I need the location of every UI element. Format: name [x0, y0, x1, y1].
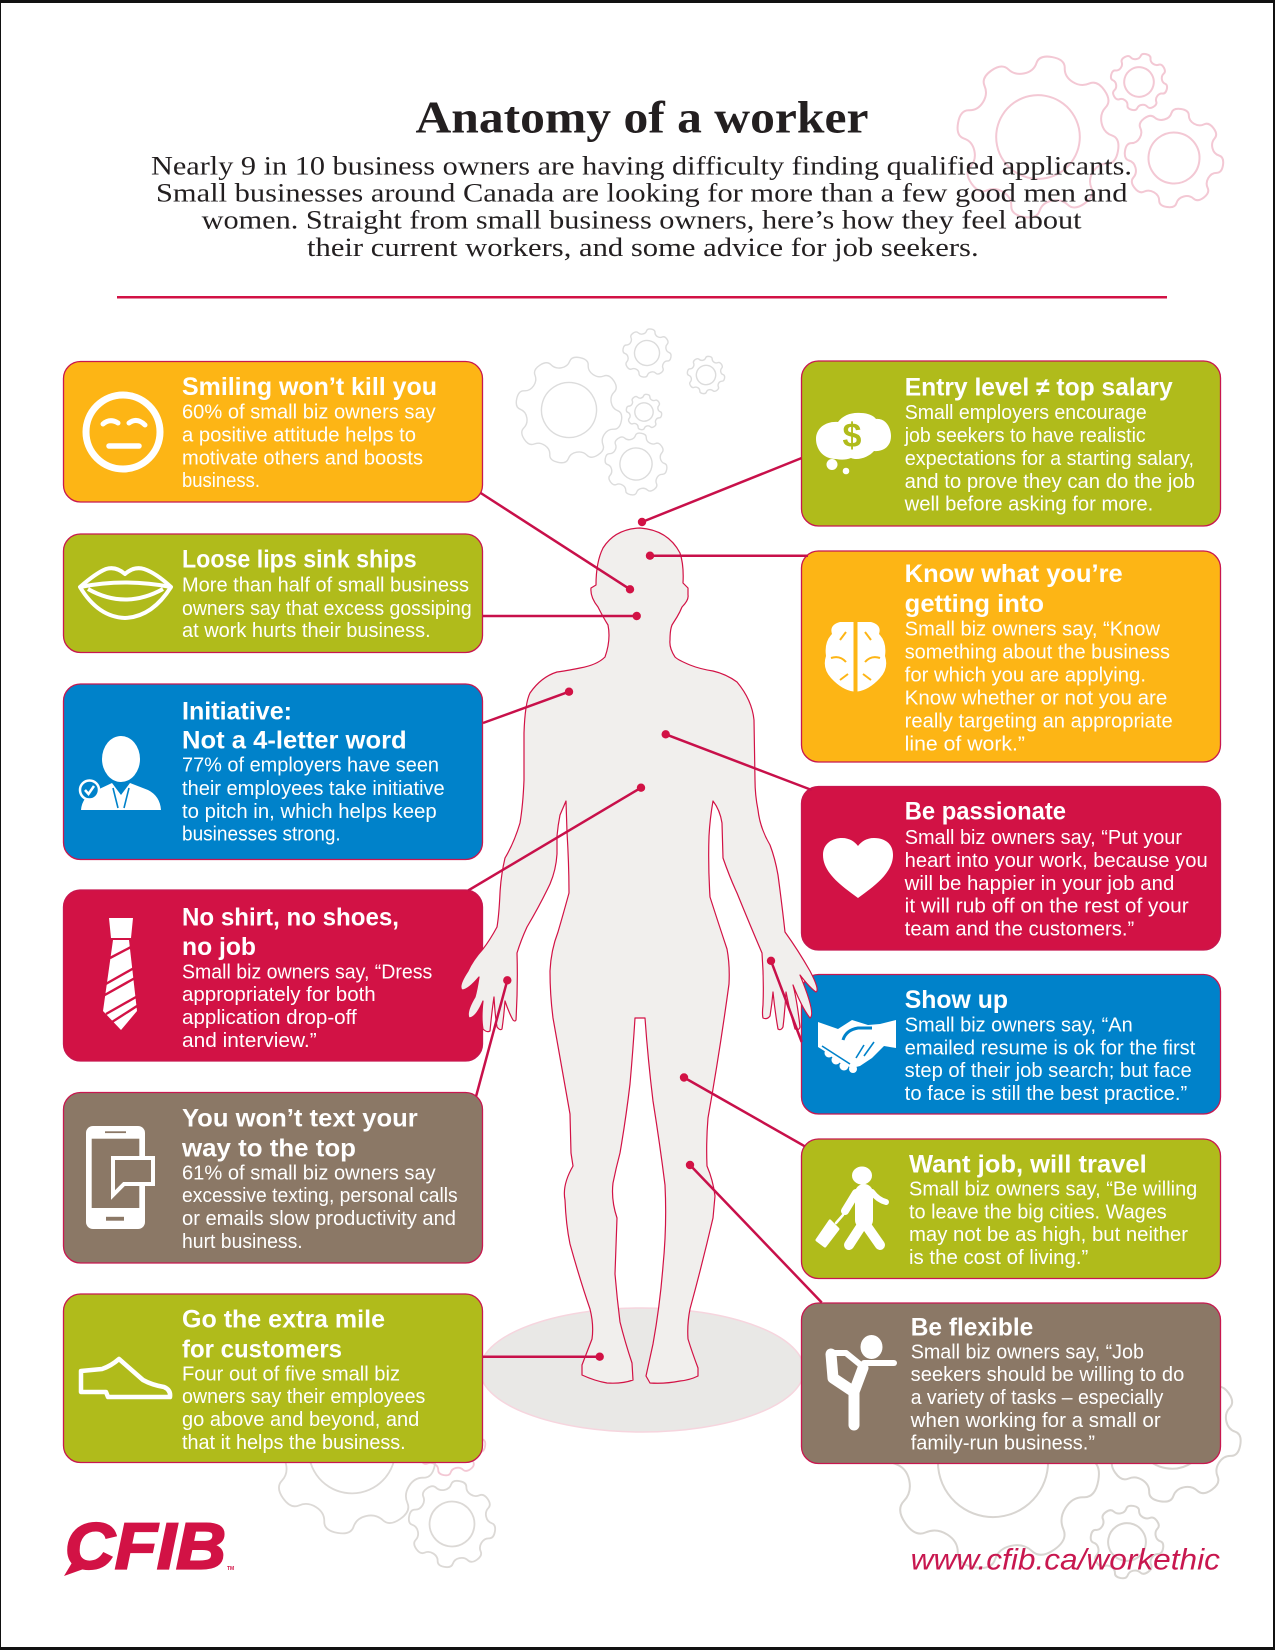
intro text: their current workers, and some advice for job seekers.	[307, 233, 979, 262]
panel: Initiative: Initiative:	[182, 697, 292, 725]
leader line: salary	[638, 458, 802, 526]
panel: Be flexible: Be flexible	[911, 1313, 1033, 1341]
panel: Want job, will travel	[802, 1139, 1220, 1278]
panel: No shirt, no shoes, no job: and interview.”	[182, 1030, 317, 1052]
panel: Show up: Small biz owners say, “An	[905, 1015, 1133, 1037]
panel: Want job, will travel: Small biz owners say, “Be willing	[909, 1178, 1197, 1200]
panel: Be flexible: family-run business.”	[911, 1432, 1095, 1454]
leader line: phone	[476, 976, 511, 1097]
panel: Smiling won't kill you: motivate others and boosts	[182, 448, 423, 470]
panel: Show up	[802, 974, 1220, 1114]
icon: heart	[823, 838, 893, 898]
human figure	[461, 528, 817, 1383]
panel: Loose lips sink ships: More than half of small business	[182, 575, 469, 597]
icon: person with check	[80, 736, 161, 810]
panel: Loose lips sink ships	[64, 534, 482, 652]
panel: Know what you're getting into: getting into	[905, 590, 1044, 618]
panel: Be passionate: Be passionate	[905, 797, 1066, 825]
intro text: Small businesses around Canada are looking for more than a few good men and	[156, 178, 1128, 208]
panel: Entry level does not equal top salary	[802, 361, 1220, 526]
panel: Initiative	[64, 684, 482, 860]
floor ellipse	[480, 1308, 804, 1432]
panel: No shirt, no shoes, no job	[64, 890, 482, 1061]
panel: Know what you're getting into: Know what you’re	[905, 560, 1123, 588]
panel: Entry level does not equal top salary: job seekers to have realistic	[904, 425, 1146, 447]
panel: Entry level does not equal top salary: and to prove they can do the job	[905, 471, 1195, 493]
intro text: Nearly 9 in 10 business owners are having difficulty finding qualified applicants.	[151, 151, 1132, 180]
panel: Initiative: their employees take initiative	[182, 778, 445, 800]
decorative gears: bottom right	[869, 1338, 1252, 1586]
panel: Want job, will travel: Want job, will travel	[909, 1150, 1147, 1178]
panel: Be flexible: a variety of tasks – especially	[911, 1387, 1163, 1409]
panel: Go the extra mile for customers: that it helps the business.	[182, 1432, 406, 1454]
icon: shoe	[81, 1359, 170, 1397]
panel: No shirt, no shoes, no job: application drop-off	[182, 1007, 357, 1029]
CFIB logo: TM	[227, 1566, 234, 1572]
panel: Be flexible: seekers should be willing to do	[911, 1364, 1184, 1386]
panel: Want job, will travel: is the cost of living.”	[909, 1247, 1088, 1269]
leader line: heart	[662, 730, 812, 790]
panel: Smiling won't kill you: business.	[182, 470, 260, 492]
header rule	[117, 296, 1167, 298]
panel: Smiling won't kill you: a positive attitude helps to	[182, 425, 416, 447]
panel: Smiling won't kill you: Smiling won’t kill you	[182, 373, 437, 401]
leader line: brain	[646, 552, 808, 560]
icon: lips	[80, 568, 171, 618]
icon: phone with speech bubble	[86, 1126, 153, 1229]
panel: No shirt, no shoes, no job: Small biz owners say, “Dress	[182, 962, 432, 984]
panel: Go the extra mile for customers: Four out of five small biz	[182, 1363, 400, 1385]
panel: Know what you're getting into: really targeting an appropriate	[905, 710, 1173, 732]
panel: Be passionate	[802, 786, 1220, 950]
panel: Know what you're getting into: for which you are applying.	[905, 664, 1146, 686]
panel: Be passionate: heart into your work, because you	[905, 850, 1208, 872]
panel: Know what you're getting into: Know whether or not you are	[905, 687, 1167, 709]
leader line: flexible	[686, 1161, 822, 1302]
panel: Want job, will travel: to leave the big cities. Wages	[909, 1201, 1167, 1223]
panel: No shirt, no shoes, no job: appropriately for both	[182, 984, 376, 1006]
panel: Show up: to face is still the best practice.”	[905, 1083, 1187, 1105]
panel: Initiative: to pitch in, which helps keep	[182, 801, 437, 823]
panel: Show up: step of their job search; but face	[905, 1060, 1192, 1082]
panel: Go the extra mile for customers: go above and beyond, and	[182, 1409, 419, 1431]
icon: handshake	[818, 1020, 896, 1073]
decorative gears: top right	[944, 43, 1230, 231]
panel: Go the extra mile for customers: owners say their employees	[182, 1386, 425, 1408]
intro text: women. Straight from small business owners, here’s how they feel about	[202, 206, 1083, 235]
leader line: shoe	[483, 1352, 604, 1361]
panel: Know what you're getting into	[802, 551, 1220, 762]
panel: Smiling won't kill you	[64, 362, 482, 502]
panel: You won't text your way to the top: 61% of small biz owners say	[182, 1162, 436, 1184]
panel: Know what you're getting into: something about the business	[905, 642, 1170, 664]
panel: Be flexible: Small biz owners say, “Job	[911, 1342, 1144, 1364]
panel: You won't text your way to the top: way to the top	[181, 1135, 356, 1163]
leader line: initiative	[483, 688, 573, 723]
panel: Be passionate: will be happier in your job and	[904, 873, 1174, 895]
panel: Show up: emailed resume is ok for the first	[905, 1038, 1196, 1060]
CFIB logo: CFIB	[65, 1510, 226, 1582]
website URL: www.cfib.ca/workethic	[911, 1544, 1220, 1577]
leader line: handshake	[767, 957, 802, 1042]
decorative gears: bottom left	[255, 1353, 502, 1574]
panel: Loose lips sink ships: at work hurts their business.	[182, 620, 431, 642]
leader line: tie	[468, 784, 645, 891]
icon: thought cloud with dollar: $	[843, 417, 862, 455]
panel: Loose lips sink ships: owners say that excess gossiping	[182, 598, 472, 620]
leader line: travel	[680, 1073, 805, 1146]
panel: You won't text your way to the top: or emails slow productivity and	[182, 1208, 456, 1230]
panel: You won't text your way to the top: excessive texting, personal calls	[182, 1185, 458, 1207]
panel: Want job, will travel: may not be as high, but neither	[909, 1224, 1188, 1246]
icon: stretching figure	[829, 1335, 894, 1425]
leader line: smile	[481, 493, 634, 594]
icon: thought cloud with dollar	[816, 413, 891, 474]
panel: Be passionate: Small biz owners say, “Put your	[905, 827, 1182, 849]
panel: Be flexible	[802, 1303, 1220, 1464]
panel: You won't text your way to the top	[64, 1092, 482, 1263]
panel: No shirt, no shoes, no job: no job	[182, 933, 256, 961]
panel: You won't text your way to the top: You won’t text your	[182, 1105, 418, 1133]
panel: Go the extra mile for customers: Go the extra mile	[182, 1306, 385, 1334]
panel: Entry level does not equal top salary: Small employers encourage	[905, 402, 1147, 424]
panel: Entry level does not equal top salary: expectations for a starting salary,	[905, 448, 1194, 470]
icon: traveller with suitcase	[817, 1166, 886, 1246]
panel: No shirt, no shoes, no job: No shirt, no shoes,	[182, 904, 399, 932]
panel: Go the extra mile for customers: for customers	[182, 1336, 342, 1364]
panel: Show up: Show up	[905, 986, 1008, 1014]
decorative gears: above the figure	[506, 325, 728, 500]
icon: brain	[825, 622, 886, 692]
leader line: lips	[483, 612, 641, 620]
panel: Go the extra mile for customers	[64, 1294, 482, 1462]
intro text	[151, 151, 1132, 262]
icon: necktie	[103, 918, 137, 1030]
title: Anatomy of a worker	[416, 93, 868, 143]
panel: Smiling won't kill you: 60% of small biz owners say	[182, 402, 436, 424]
panel: Initiative: businesses strong.	[182, 824, 341, 846]
panel: You won't text your way to the top: hurt business.	[182, 1231, 303, 1253]
panel: Loose lips sink ships: Loose lips sink ships	[182, 546, 417, 574]
panel: Initiative: 77% of employers have seen	[182, 755, 439, 777]
panel: Be passionate: it will rub off on the rest of your	[905, 896, 1189, 918]
panel: Entry level does not equal top salary: well before asking for more.	[904, 494, 1153, 516]
panel: Be passionate: team and the customers.”	[905, 918, 1134, 940]
icon: face	[86, 395, 160, 469]
panel: Initiative: Not a 4-letter word	[182, 727, 407, 755]
panel: Be flexible: when working for a small or	[910, 1410, 1161, 1432]
panel: Entry level does not equal top salary: Entry level ≠ top salary	[905, 373, 1173, 401]
panel: Know what you're getting into: Small biz owners say, “Know	[905, 619, 1161, 641]
panel: Know what you're getting into: line of work.”	[905, 733, 1025, 755]
